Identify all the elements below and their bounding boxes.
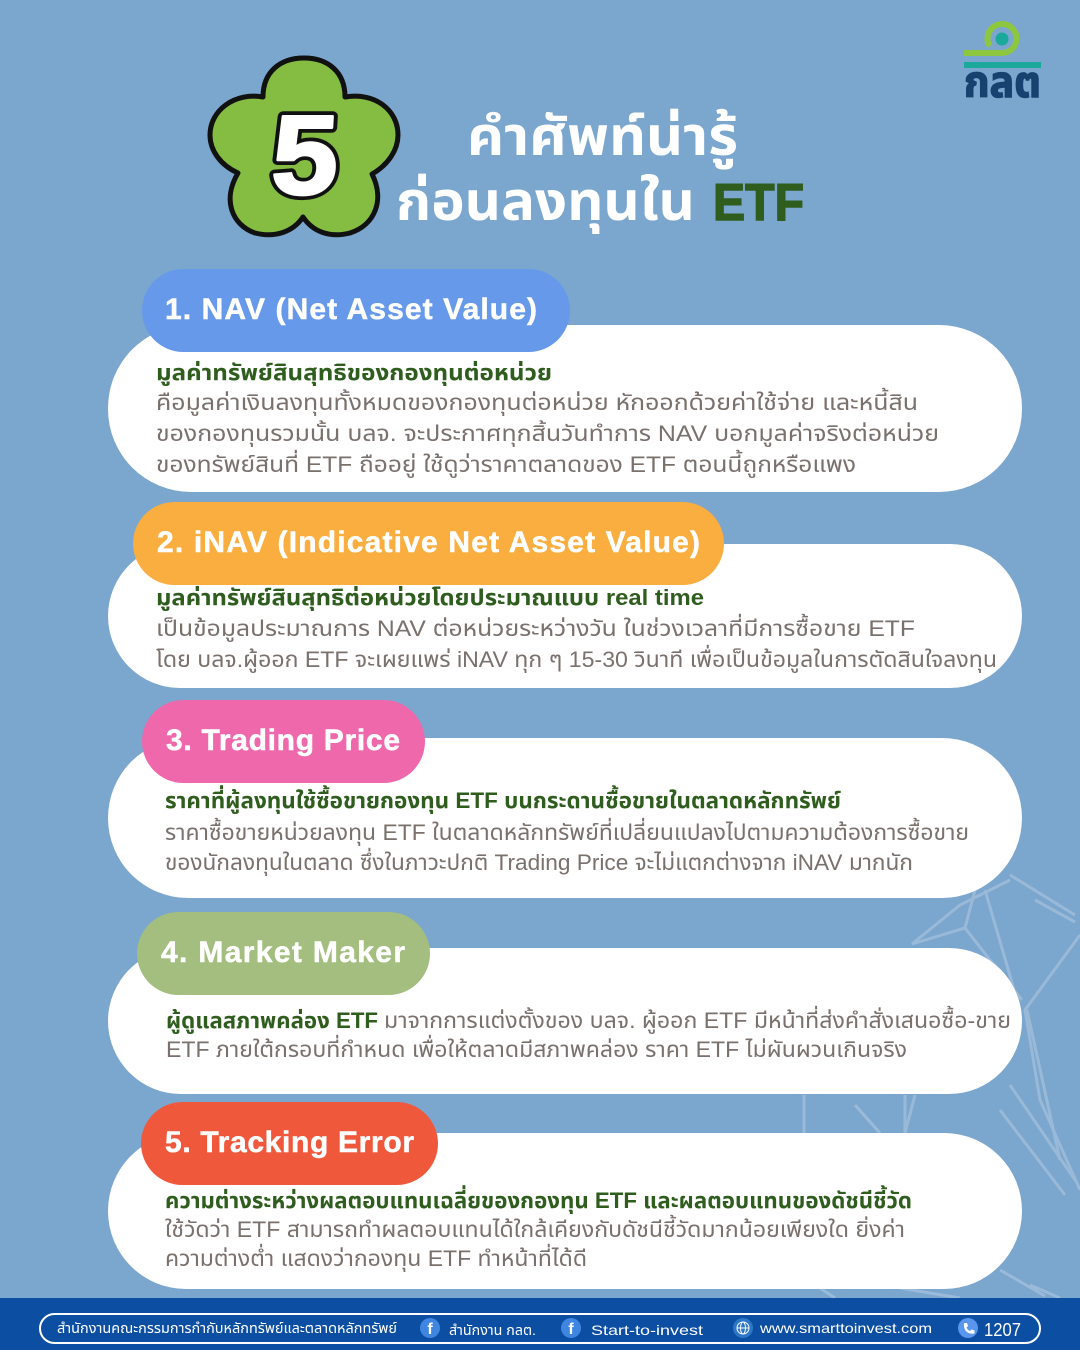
panel 5: Tracking Error: ความต่างระหว่างผลตอบแทนเฉลี่ยของกองทุน ETF และผลตอบแทนของดัชนีชี้วัด [165,1185,912,1214]
footer bar: f [427,1321,433,1338]
panel 1: NAV: 1. NAV (Net Asset Value) [165,293,537,326]
panel 4: Market Maker: ผู้ดูแลสภาพคล่อง ETF [166,1008,378,1034]
footer bar: www.smarttoinvest.com [759,1320,932,1336]
panel 3: Trading Price: ราคาซื้อขายหน่วยลงทุน ETF ในตลาดหลักทรัพย์ที่เปลี่ยนแปลงไปตามความต้องการซื้อขาย [165,817,969,846]
panel 3: Trading Price [108,700,1022,898]
panel 3: Trading Price: ของนักลงทุนในตลาด ซึ่งในภาวะปกติ Trading Price จะไม่แตกต่างจาก iNAV มากนัก [165,847,913,876]
panel 2: iNAV: มูลค่าทรัพย์สินสุทธิต่อหน่วยโดยประมาณแบบ real time [156,585,704,611]
title: คำศัพท์น่ารู้ [467,107,738,169]
icon: green flower with number 5 [210,58,398,235]
icon: green flower with number 5: 5 [268,92,342,218]
footer bar: สำนักงานคณะกรรมการกำกับหลักทรัพย์และตลาดหลักทรัพย์ [57,1320,397,1336]
panel 2: iNAV [108,502,1022,688]
logo: SEC Thailand [964,24,1041,107]
title: ก่อนลงทุนใน [396,172,695,234]
panel 1: NAV: ของกองทุนรวมนั้น บลจ. จะประกาศทุกสิ้นวันทำการ NAV บอกมูลค่าจริงต่อหน่วย [156,419,939,447]
logo: SEC Thailand: กลต [964,59,1041,107]
panel 1: NAV: คือมูลค่าเงินลงทุนทั้งหมดของกองทุนต่อหน่วย หักออกด้วยค่าใช้จ่าย และหนี้สิน [156,387,918,416]
panel 1: NAV: มูลค่าทรัพย์สินสุทธิของกองทุนต่อหน่วย [156,360,552,386]
panel 4: Market Maker: ETF ภายใต้กรอบที่กำหนด เพื่อให้ตลาดมีสภาพคล่อง ราคา ETF ไม่ผันผวนเกินจริง [166,1034,907,1062]
panel 5: Tracking Error: ใช้วัดว่า ETF สามารถทำผลตอบแทนได้ใกล้เคียงกับดัชนีชี้วัดมากน้อยเพียงใด ยิ่งค่า [165,1214,905,1242]
panel 4: Market Maker: มาจากการแต่งตั้งของ บลจ. ผู้ออก ETF มีหน้าที่ส่งคำสั่งเสนอซื้อ-ขาย [384,1005,1011,1034]
footer bar: f [568,1321,574,1338]
panel 3: Trading Price: ราคาที่ผู้ลงทุนใช้ซื้อขายกองทุน ETF บนกระดานซื้อขายในตลาดหลักทรัพย์ [165,785,841,814]
footer bar [0,1298,1080,1350]
footer bar: สำนักงาน กลต. [449,1322,536,1338]
title: ETF [713,174,804,232]
panel 4: Market Maker: 4. Market Maker [161,936,405,969]
title [396,107,804,234]
panel 5: Tracking Error: 5. Tracking Error [165,1126,414,1159]
panel 1: NAV: ของทรัพย์สินที่ ETF ถืออยู่ ใช้ดูว่าราคาตลาดของ ETF ตอนนี้ถูกหรือแพง [156,449,856,478]
panel 5: Tracking Error [108,1102,1022,1289]
background pattern: origami lines [804,875,1080,1298]
panel 1: NAV [108,269,1022,492]
footer bar: Start-to-invest [591,1322,703,1338]
panel 2: iNAV: เป็นข้อมูลประมาณการ NAV ต่อหน่วยระหว่างวัน ในช่วงเวลาที่มีการซื้อขาย ETF [156,613,915,642]
footer bar: 1207 [984,1320,1021,1340]
panel 2: iNAV: 2. iNAV (Indicative Net Asset Value) [157,526,700,559]
icon: green flower with number 5: 5 [268,92,342,218]
panel 3: Trading Price: 3. Trading Price [166,724,400,757]
panel 2: iNAV: โดย บลจ.ผู้ออก ETF จะเผยแพร่ iNAV ทุก ๆ 15-30 วินาที เพื่อเป็นข้อมูลในการตัดสินใจลงทุน [156,644,997,673]
panel 4: Market Maker [108,912,1022,1094]
panel 5: Tracking Error: ความต่างต่ำ แสดงว่ากองทุน ETF ทำหน้าที่ได้ดี [165,1243,587,1272]
